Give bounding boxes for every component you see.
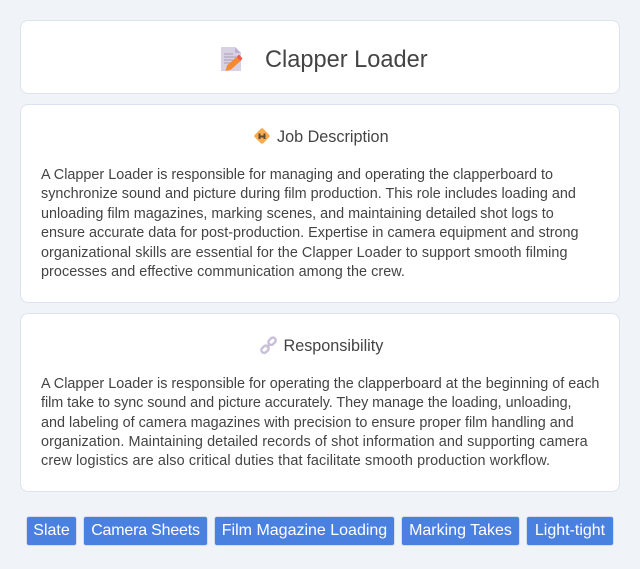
text: responsibility body: film take to sync sound and picture accurately. They manage the loading, unloading, (41, 395, 572, 411)
tag: Film Magazine Loading: Film Magazine Loading (222, 522, 387, 539)
tag: Camera Sheets (83, 516, 208, 546)
icon: memo with pencil (221, 47, 242, 71)
panel: job description (20, 104, 620, 303)
title: Clapper Loader (265, 47, 428, 73)
text: job description body: processes and effective communication among the crew. (41, 264, 405, 280)
text: responsibility body (41, 376, 599, 469)
text: job description body (41, 166, 579, 280)
text: responsibility body: crew logistics are also critical duties that facilitate smooth production workflow. (41, 453, 550, 469)
text: job description body: organizational skills are essential for the Clapper Loader to support smooth filming (41, 244, 568, 260)
tag: Slate (26, 516, 77, 546)
tag: Light-tight: Light-tight (535, 522, 605, 539)
tag: Camera Sheets: Camera Sheets (91, 522, 200, 539)
text: responsibility body: organization. Maintaining detailed records of shot information and supporting camera (41, 434, 588, 450)
tag: Marking Takes: Marking Takes (409, 522, 512, 539)
text: job description body: A Clapper Loader is responsible for managing and operating the clapperboard to (41, 166, 553, 182)
panel: responsibility (20, 313, 620, 492)
icon: link (260, 336, 277, 354)
text: responsibility body: A Clapper Loader is responsible for operating the clapperboard at the beginning of each (41, 376, 599, 392)
panel: title header (20, 20, 620, 94)
heading: responsibility: Responsibility (284, 336, 383, 354)
text: responsibility body: and labeling of camera magazines with precision to ensure proper film handling and (41, 414, 574, 430)
text: job description body: synchronize sound and picture during film production. This role includes loading and (41, 186, 576, 202)
heading: job description: Job Description (277, 128, 389, 146)
tag: Marking Takes (401, 516, 520, 546)
icon: construction diamond (254, 128, 270, 144)
text: job description body: unloading film magazines, marking scenes, and maintaining detailed shot logs to (41, 206, 554, 222)
text: job description body: ensure accurate data for post-production. Expertise in camera equipment and strong (41, 225, 579, 241)
tag: Slate: Slate (33, 522, 70, 539)
tag: Film Magazine Loading (214, 516, 395, 546)
tag: Light-tight (526, 516, 614, 546)
